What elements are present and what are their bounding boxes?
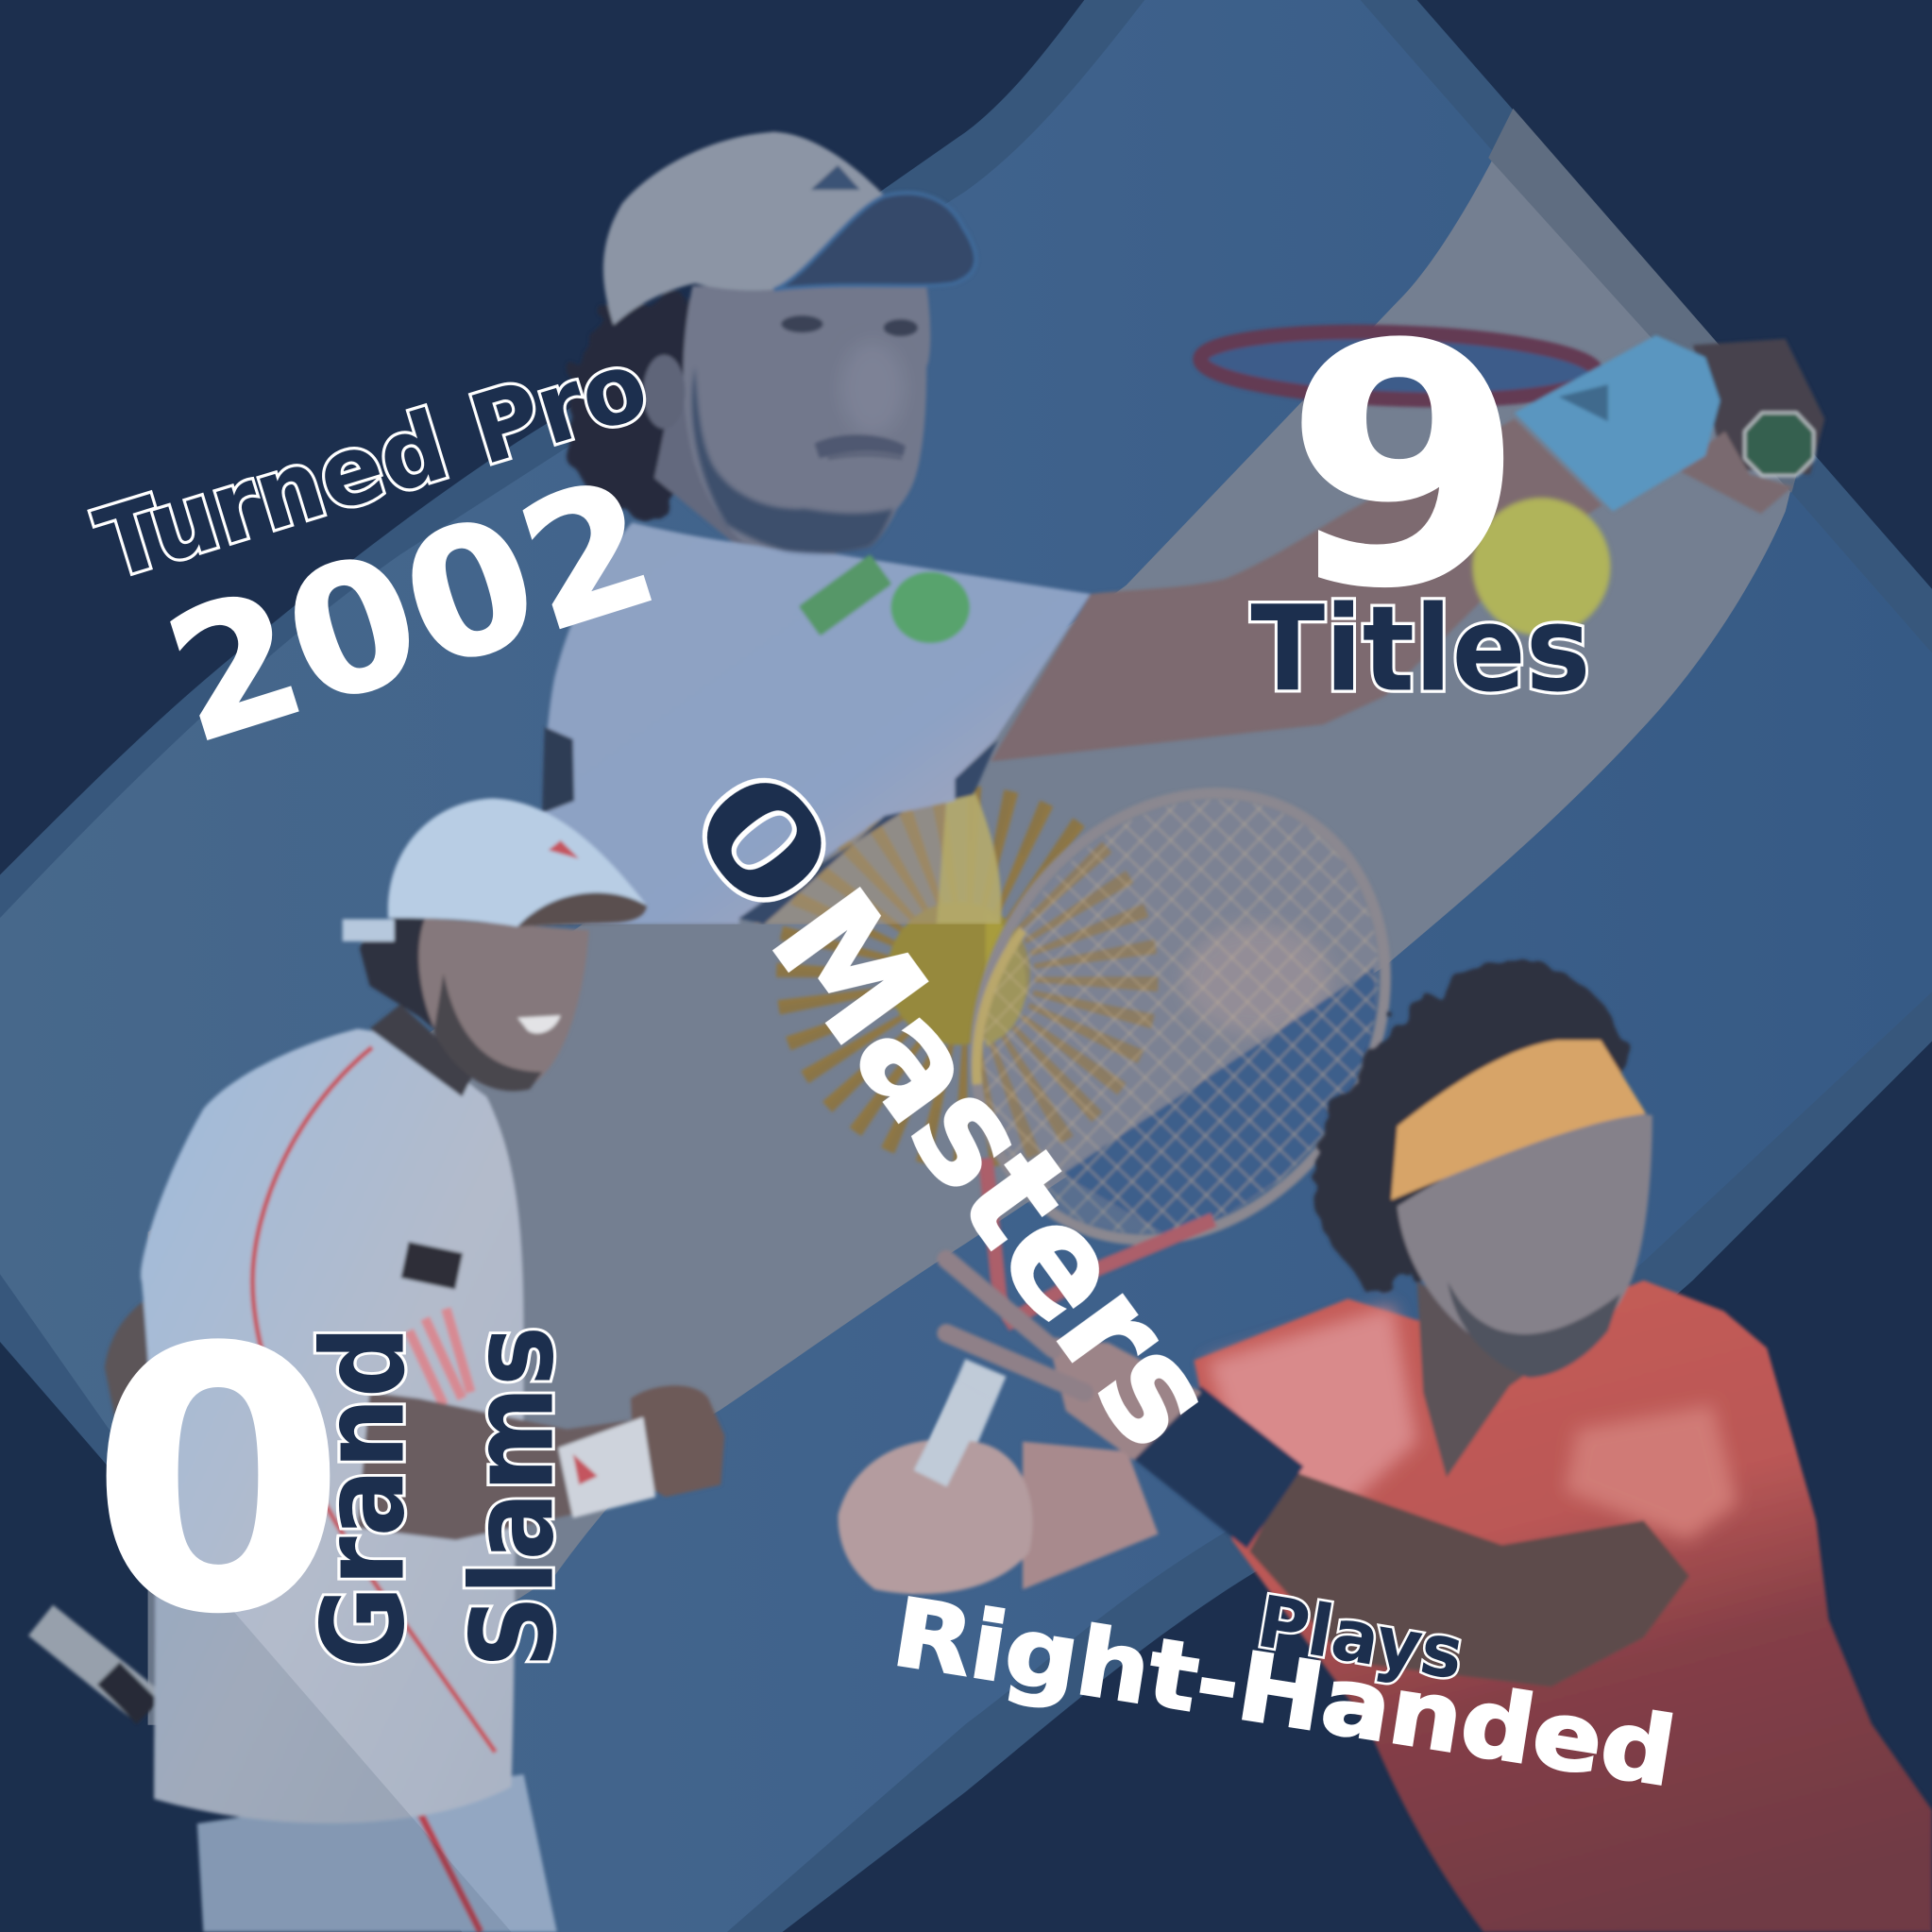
hand lower	[1674, 432, 1793, 514]
hand palm	[1047, 1337, 1201, 1460]
lower-left corner dark overlay	[0, 1342, 512, 1932]
label: Grand: Grand	[299, 1326, 431, 1669]
value: 9: 9	[1285, 276, 1524, 660]
sun long rays	[805, 815, 1130, 1140]
wristband	[1127, 1386, 1304, 1549]
lower hand	[838, 1439, 1032, 1594]
flag band over stripe	[1488, 109, 1805, 493]
cap visor inner	[517, 892, 647, 926]
forearm	[1249, 1471, 1689, 1686]
beard	[1448, 1281, 1620, 1378]
beard	[433, 974, 542, 1092]
fist	[631, 1385, 724, 1497]
shirt	[536, 522, 1091, 924]
beard	[692, 367, 893, 553]
label: Masters: Masters	[738, 861, 1250, 1477]
stat: handedness	[886, 1579, 1682, 1807]
racket band	[109, 1673, 148, 1713]
racket strings	[903, 725, 1458, 1308]
stat: turned pro	[85, 330, 677, 783]
lower torso behind sun	[754, 803, 947, 924]
sun rays	[838, 848, 1096, 1107]
face	[418, 918, 589, 1090]
shirt	[1194, 1280, 1932, 1932]
label: Turned Pro: Turned Pro	[85, 330, 660, 602]
cap visor	[773, 193, 975, 290]
photo: right player	[838, 961, 1932, 1932]
shorts stripe	[413, 1799, 481, 1932]
shirt red stripe	[252, 1047, 496, 1752]
racket throat	[986, 1159, 1213, 1325]
racket smudge	[1183, 924, 1330, 1035]
eyes	[781, 315, 823, 332]
value: 0: 0	[90, 1273, 347, 1692]
wristband	[558, 1417, 655, 1518]
cap	[388, 799, 647, 926]
large racket	[893, 716, 1467, 1584]
hair	[565, 289, 691, 523]
wristband	[1515, 335, 1720, 512]
yellow highlight strip	[937, 788, 1001, 924]
sleeve stripes	[409, 1309, 470, 1405]
sun core	[887, 902, 1030, 1045]
sun of May	[805, 815, 1130, 1140]
label: Slams: Slams	[449, 1326, 580, 1669]
sleeve logo	[401, 1242, 463, 1289]
dark shadow under sleeve	[737, 739, 998, 924]
nose highlight	[849, 351, 895, 425]
stat: titles	[1250, 276, 1591, 719]
back arm	[105, 1281, 178, 1577]
cap	[603, 132, 885, 325]
racket head tint	[903, 725, 1458, 1308]
headband	[1391, 1040, 1646, 1200]
racket frame	[1199, 326, 1598, 406]
racket left frame highlight	[976, 930, 1023, 1084]
photo: left player	[41, 799, 724, 1932]
cap logo	[811, 165, 860, 190]
wristband logo	[1559, 384, 1608, 421]
flag white stripe	[148, 161, 1791, 1725]
sleeve light	[1565, 1405, 1737, 1540]
racket handle over hand	[930, 1392, 974, 1479]
racket shaft	[41, 1620, 148, 1706]
other forearm	[1023, 1442, 1159, 1589]
sun core bright side	[986, 912, 1026, 1047]
hair	[360, 910, 493, 1047]
arm	[991, 419, 1602, 761]
shirt front light	[1208, 1306, 1417, 1509]
ear	[643, 355, 685, 429]
racket lower blue	[1062, 967, 1380, 1245]
value: 0: 0	[657, 740, 867, 943]
hair	[1312, 961, 1627, 1294]
sleeve patch: round	[890, 571, 970, 643]
wristband logo	[573, 1454, 598, 1484]
teeth	[517, 1015, 561, 1033]
tennis ball	[1472, 498, 1610, 636]
racket	[1199, 326, 1598, 406]
label: Titles: Titles	[1250, 581, 1591, 719]
face	[1398, 1114, 1652, 1373]
racket handle	[893, 1367, 986, 1584]
stat: masters	[657, 740, 1250, 1477]
shorts	[197, 1774, 557, 1932]
shirt	[141, 1029, 524, 1823]
stat: grand slams	[90, 1273, 580, 1692]
sleeve patch: green	[799, 554, 892, 636]
mouth	[828, 454, 902, 458]
racket grip	[1745, 413, 1814, 476]
value: 2002: 2002	[145, 440, 677, 783]
neck	[652, 404, 835, 554]
racket frame	[893, 716, 1467, 1317]
cap logo	[549, 840, 579, 858]
fingers	[946, 1260, 1084, 1392]
forearm	[357, 1392, 653, 1540]
hand upper	[1693, 339, 1824, 474]
photo: top player	[536, 132, 1824, 924]
neck	[369, 1004, 474, 1096]
value: Right-Handed: Right-Handed	[886, 1579, 1682, 1807]
shirt dark text	[542, 727, 574, 813]
moustache	[815, 434, 906, 458]
cap brim	[343, 919, 395, 941]
neck	[1417, 1281, 1552, 1478]
face	[684, 286, 930, 552]
label: Plays: Plays	[1251, 1580, 1469, 1696]
